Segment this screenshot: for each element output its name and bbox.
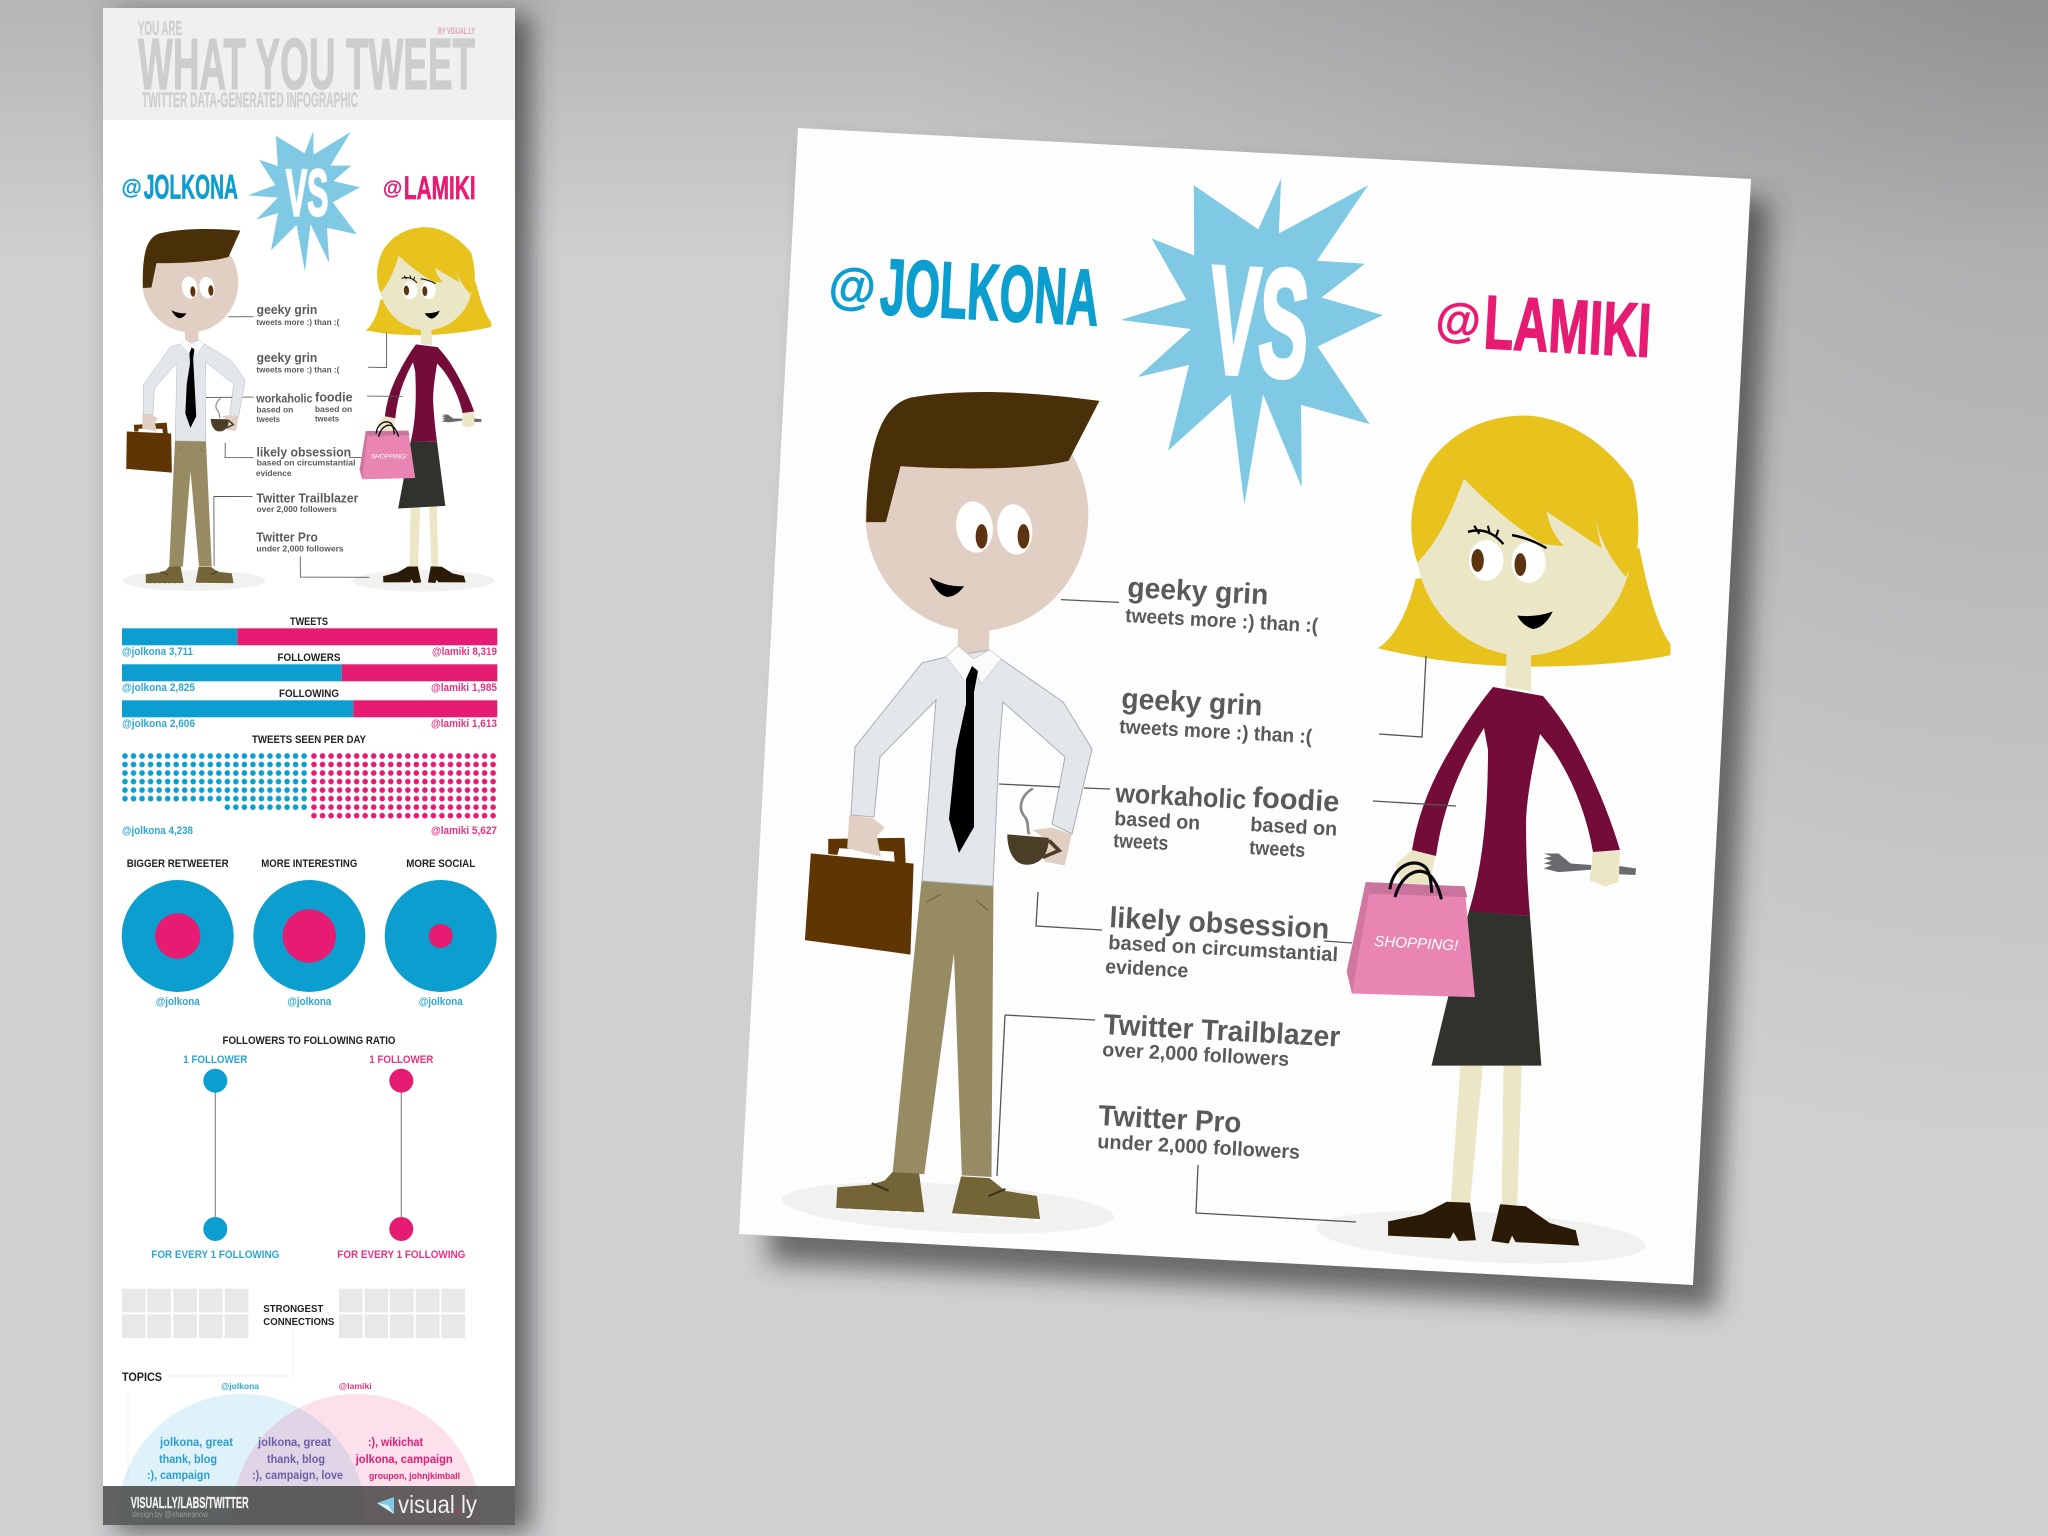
callouts text: based on	[315, 404, 352, 414]
topics: venn diagram: thank, blog	[267, 1454, 325, 1466]
venn circle: lamiki	[232, 1394, 480, 1525]
callout: twitter trailblazer: Twitter Trailblazer	[1103, 1009, 1341, 1054]
dot chart: tweets seen per day: @lamiki 5,627	[431, 825, 497, 837]
byline: BY VISUAL.LY	[438, 26, 475, 36]
callout: geeky grin (lamiki): tweets more :) than :(	[1119, 716, 1313, 748]
callout: likely obsession: based on circumstantial	[1108, 932, 1339, 966]
callout: twitter trailblazer: over 2,000 followers	[1102, 1039, 1290, 1071]
drop shadow: tall infographic	[116, 14, 531, 1532]
ground shadow: man	[122, 570, 265, 591]
bar chart: followers	[122, 652, 497, 694]
ratio chart: lamiki: FOR EVERY 1 FOLLOWING	[337, 1249, 465, 1261]
bar chart: tweets: TWEETS	[290, 616, 328, 628]
handle: jolkona	[120, 163, 240, 212]
handle: jolkona: @	[122, 175, 142, 199]
strongest connections: label: STRONGEST	[263, 1303, 324, 1315]
poster background	[739, 128, 1751, 1285]
bar chart: following: @jolkona 2,606	[122, 718, 195, 730]
panel: enlarged rotated poster	[739, 128, 1751, 1285]
ground shadow: woman	[352, 570, 494, 592]
callouts text: Twitter Pro	[256, 531, 318, 545]
bar chart: followers: FOLLOWERS	[278, 652, 340, 664]
topics: venn diagram: :), campaign, love	[252, 1470, 343, 1482]
callouts text	[243, 298, 362, 558]
bar chart: followers: @jolkona 2,825	[122, 682, 195, 694]
topics: venn diagram: jolkona, great	[159, 1437, 233, 1449]
callouts text: foodie	[315, 390, 353, 404]
callout: workaholic: workaholic	[1114, 778, 1247, 815]
handle: jolkona	[827, 242, 1102, 343]
callout: geeky grin (jolkona): geeky grin	[1127, 572, 1269, 611]
handle: lamiki: @	[383, 178, 402, 200]
callout: geeky grin (lamiki)	[1119, 683, 1313, 748]
circle chart: more social: MORE SOCIAL	[406, 858, 475, 870]
callout: workaholic	[1113, 778, 1247, 855]
footer bar: visual.ly	[398, 1491, 477, 1519]
callouts text: evidence	[256, 468, 292, 478]
icon: visual.ly arrow	[377, 1497, 394, 1514]
circle chart: more interesting: MORE INTERESTING	[261, 858, 357, 870]
callouts text: likely obsession	[257, 445, 351, 459]
circle chart: more social	[385, 858, 497, 1008]
character: man	[836, 392, 1099, 1220]
bar chart: following: FOLLOWING	[279, 688, 339, 700]
callout: likely obsession: evidence	[1105, 956, 1189, 982]
icon: shopping bag	[1347, 863, 1475, 997]
character: woman	[1378, 416, 1670, 1246]
callout: workaholic: based on	[1114, 808, 1201, 835]
ground shadow: man	[781, 1175, 1115, 1241]
circle chart: bigger retweeter	[122, 858, 234, 1008]
dot chart: tweets seen per day: TWEETS SEEN PER DAY	[252, 734, 367, 746]
callouts text: geeky grin	[257, 351, 317, 365]
topics: venn diagram: TOPICS	[122, 1370, 162, 1384]
strongest connections: jolkona grid	[122, 1289, 248, 1338]
handle: jolkona: @	[827, 257, 877, 315]
icon: VS starburst: VS	[286, 156, 328, 230]
header band: TWITTER DATA-GENERATED INFOGRAPHIC	[142, 89, 358, 112]
drop shadow: enlarged poster	[768, 150, 1770, 1310]
handle: lamiki: LAMIKI	[1482, 280, 1653, 374]
header band: YOU ARE	[138, 18, 182, 40]
callout: twitter pro: Twitter Pro	[1098, 1100, 1242, 1140]
panel background	[103, 8, 515, 1525]
callouts text: geeky grin	[257, 303, 317, 317]
icon: briefcase	[124, 422, 173, 475]
icon: coffee cup	[1007, 789, 1059, 865]
circle chart: more social: @jolkona	[419, 996, 463, 1008]
icon: VS starburst	[1121, 178, 1383, 504]
heading: followers to following ratio: FOLLOWERS TO FOLLOWING RATIO	[222, 1035, 396, 1047]
bar chart: tweets	[122, 616, 497, 658]
dot chart: tweets seen per day	[121, 734, 497, 837]
callouts text: tweets	[315, 414, 339, 424]
callouts text: based on	[256, 404, 293, 414]
callouts text: under 2,000 followers	[256, 543, 344, 553]
strongest connections: lamiki grid	[339, 1289, 465, 1338]
bar chart: tweets: @jolkona 3,711	[122, 646, 193, 658]
topics: venn diagram: jolkona, great	[257, 1437, 331, 1449]
character: woman	[360, 224, 505, 587]
topics: venn diagram: :), campaign	[147, 1470, 210, 1482]
callout: twitter pro	[1097, 1100, 1301, 1164]
title: WHAT YOU TWEET	[138, 25, 475, 105]
panel: full tall infographic	[99, 8, 515, 1525]
callout leader lines	[997, 600, 1456, 1222]
callout lines	[201, 308, 412, 586]
handle: lamiki: @	[1434, 292, 1482, 347]
bar chart: following: @lamiki 1,613	[431, 718, 497, 730]
header band	[103, 8, 515, 120]
callout: foodie	[1249, 782, 1340, 862]
topics: venn diagram: jolkona, campaign	[355, 1454, 453, 1466]
ratio chart: jolkona: 1 FOLLOWER	[183, 1054, 247, 1066]
callout: workaholic: tweets	[1113, 830, 1169, 855]
handle: jolkona: JOLKONA	[878, 242, 1102, 343]
callout: twitter pro: under 2,000 followers	[1097, 1131, 1301, 1164]
handle: lamiki: LAMIKI	[404, 169, 476, 206]
section: versus scene	[99, 122, 505, 611]
callouts text: Twitter Trailblazer	[256, 491, 358, 505]
callouts text: workaholic	[255, 392, 313, 405]
icon: shopping bag: SHOPPING!	[1374, 933, 1459, 955]
circle chart: bigger retweeter: BIGGER RETWEETER	[127, 858, 229, 870]
callout: geeky grin (jolkona)	[1125, 572, 1319, 637]
topics: venn diagram: :), wikichat	[368, 1437, 423, 1449]
callouts text: tweets more :) than :(	[256, 365, 339, 375]
callouts text: over 2,000 followers	[256, 504, 337, 514]
strongest connections: label	[263, 1303, 334, 1328]
circle chart: more interesting: @jolkona	[287, 996, 332, 1008]
bar chart: following	[122, 688, 497, 730]
icon: coffee cup	[210, 398, 234, 432]
callout: geeky grin (lamiki): geeky grin	[1121, 683, 1263, 722]
callout: likely obsession	[1105, 902, 1339, 982]
callout: likely obsession: likely obsession	[1109, 902, 1330, 946]
venn circle: jolkona	[118, 1394, 366, 1525]
icon: VS starburst: VS	[1205, 234, 1313, 410]
ground shadow: woman	[1315, 1203, 1647, 1271]
callouts text: tweets	[256, 414, 280, 424]
topics: venn diagram: thank, blog	[159, 1454, 217, 1466]
character: man	[127, 227, 259, 588]
callout: foodie: foodie	[1252, 782, 1340, 819]
icon: shopping bag: SHOPPING!	[371, 453, 407, 460]
icon: briefcase	[805, 838, 914, 955]
icon: shopping bag	[357, 420, 415, 481]
handle: lamiki	[1434, 280, 1653, 374]
circle chart: more interesting	[253, 858, 365, 1008]
callouts text: tweets more :) than :(	[256, 317, 340, 327]
footer bar	[103, 1486, 515, 1525]
bar chart: tweets: @lamiki 8,319	[432, 646, 497, 658]
icon: VS starburst	[244, 129, 364, 275]
callouts text: based on circumstantial	[257, 458, 355, 468]
ratio chart: jolkona	[151, 1054, 279, 1261]
footer bar: design by @shanesnow	[132, 1510, 208, 1519]
callout: geeky grin (jolkona): tweets more :) than :(	[1125, 605, 1319, 637]
ratio chart: jolkona: FOR EVERY 1 FOLLOWING	[151, 1249, 279, 1261]
handle: jolkona: JOLKONA	[144, 168, 238, 206]
dot chart: tweets seen per day: @jolkona 4,238	[122, 825, 193, 837]
handle: lamiki	[381, 165, 478, 211]
ratio chart: lamiki	[337, 1054, 465, 1261]
topics: venn diagram	[118, 1370, 480, 1525]
ratio chart: lamiki: 1 FOLLOWER	[369, 1054, 433, 1066]
footer bar: VISUAL.LY/LABS/TWITTER	[131, 1495, 249, 1512]
callout: foodie: tweets	[1249, 837, 1306, 862]
topics: venn diagram: @jolkona	[221, 1381, 259, 1391]
strongest connections: label: CONNECTIONS	[263, 1316, 334, 1328]
bar chart: followers: @lamiki 1,985	[431, 682, 497, 694]
callout: foodie: based on	[1250, 814, 1338, 841]
topics: venn diagram: @lamiki	[339, 1381, 372, 1391]
topics: venn diagram: groupon, johnjkimball	[369, 1471, 460, 1482]
circle chart: bigger retweeter: @jolkona	[156, 996, 200, 1008]
